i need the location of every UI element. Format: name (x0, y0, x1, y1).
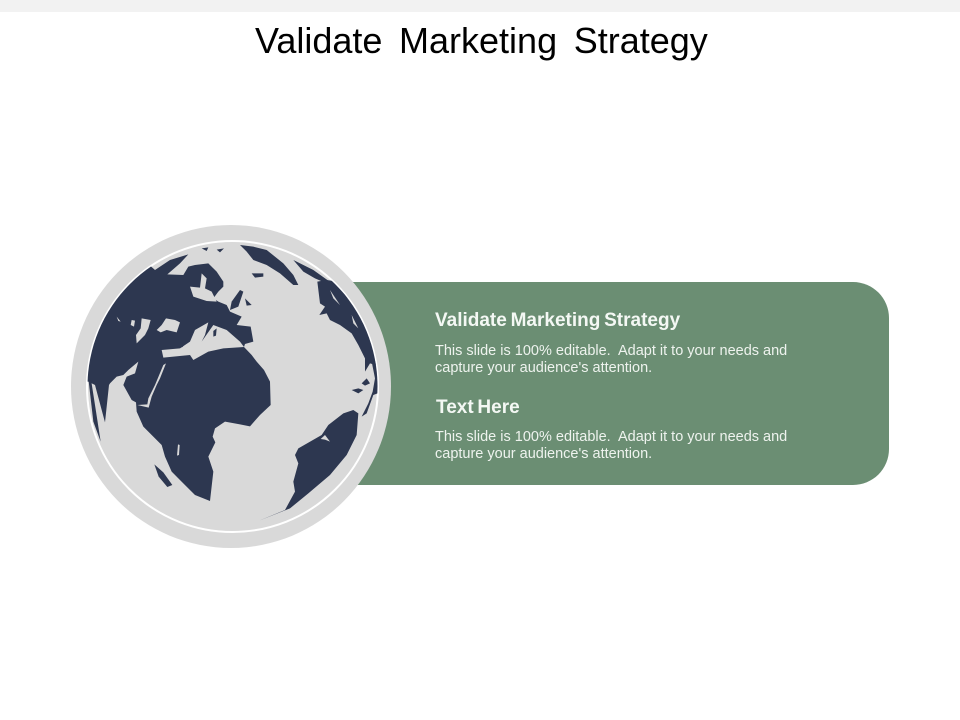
land: Mexico and Central America (362, 362, 378, 416)
land: Amazon delta (321, 435, 330, 442)
land: Hudson Bay and inlets (330, 290, 358, 328)
land: Britain (230, 290, 243, 310)
land: Eurasia and Africa (88, 254, 271, 501)
heading: Validate Marketing Strategy: Validate Marketing Strategy (435, 310, 680, 331)
title: Validate Marketing Strategy (255, 20, 708, 61)
land: Baltic inlets (190, 273, 217, 302)
land: South America (258, 410, 358, 521)
heading: Text Here: Text Here (436, 397, 520, 418)
text block: second body: This slide is 100% editable. Adapt it to your needs and capture your audience's attention. (435, 429, 787, 462)
land: North America (317, 280, 376, 372)
land: Black Sea (157, 318, 180, 332)
outer grey ring (71, 225, 391, 548)
land: Ireland (245, 298, 252, 306)
land: Arctic Canada (293, 260, 350, 298)
land: thin Indian coast (88, 378, 101, 442)
white ring (87, 241, 378, 532)
land: Greenland (240, 245, 298, 285)
land: Caspian Sea (136, 318, 151, 343)
land: small lakes (117, 317, 135, 327)
land: Cuba and Hispaniola (352, 378, 370, 393)
land: Madagascar (154, 464, 172, 487)
land: Iceland (252, 273, 263, 278)
world map landmasses (70, 245, 390, 521)
top strip (0, 0, 960, 12)
land: lake in Africa (177, 444, 180, 456)
text block: first body: This slide is 100% editable. Adapt it to your needs and capture your audience's attention. (435, 343, 787, 376)
land: Arctic islands (202, 247, 224, 252)
panel: green text card (330, 282, 889, 485)
land: Red Sea and Gulf of Aden (137, 363, 166, 408)
land: Mediterranean islands (182, 328, 217, 348)
land: Mediterranean sea (162, 322, 244, 360)
globe (71, 225, 391, 548)
